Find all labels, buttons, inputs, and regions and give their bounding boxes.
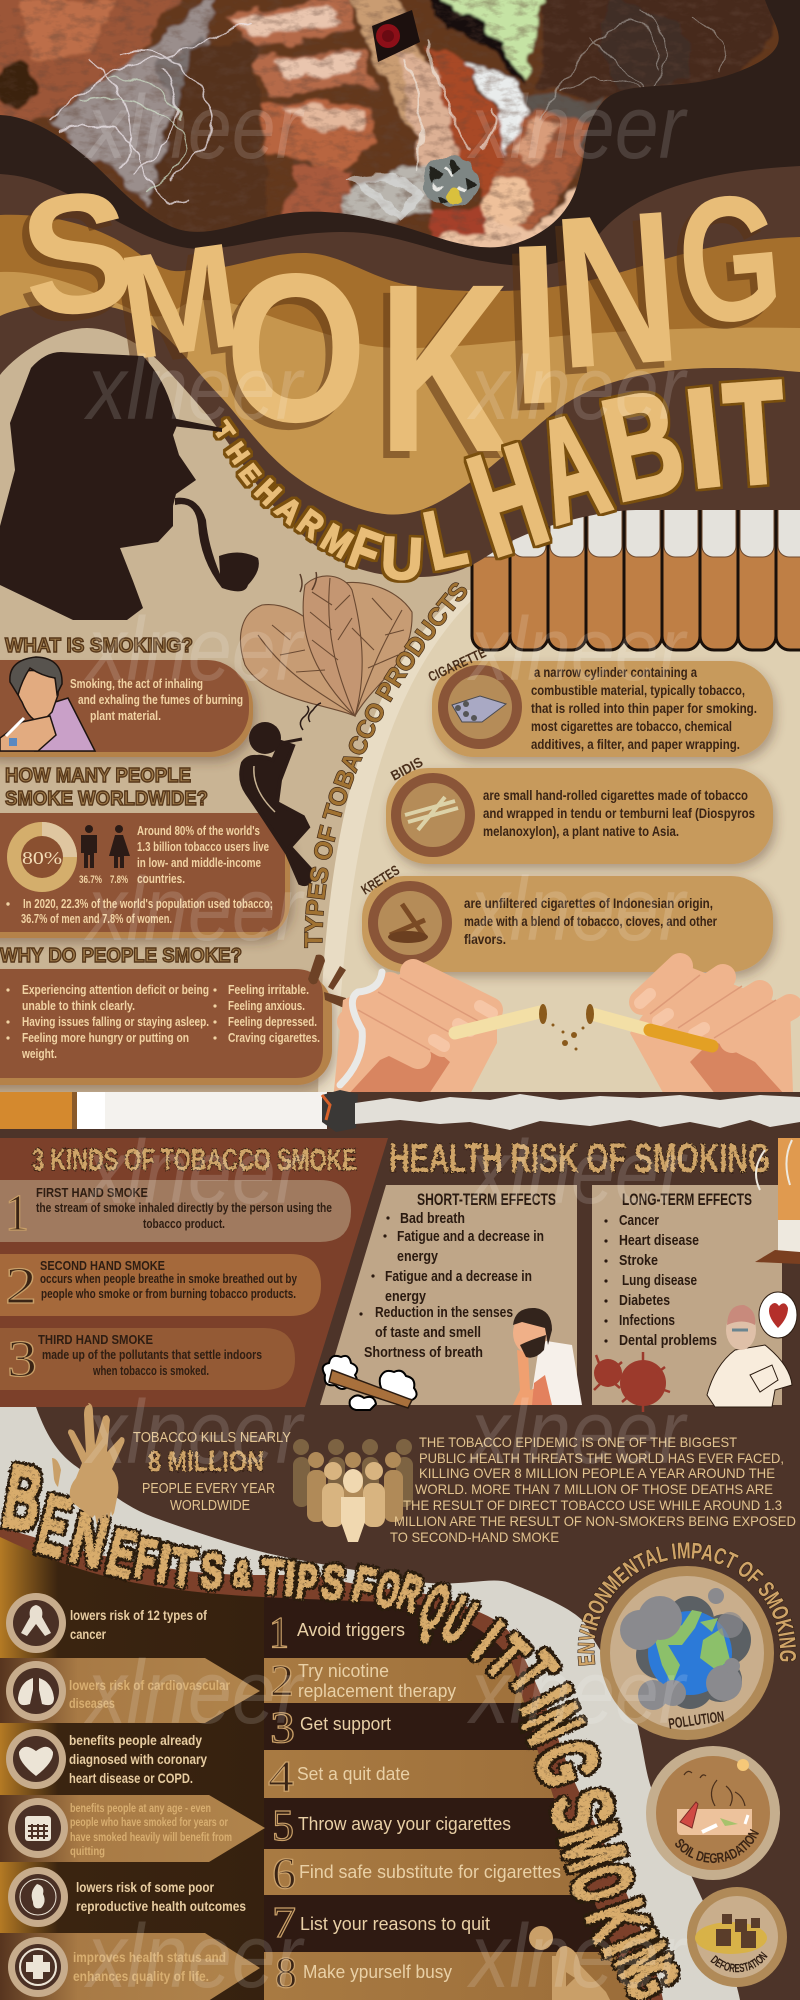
icon: man and woman with rates bbox=[79, 825, 130, 886]
icon: burning cigar with smoke bbox=[323, 1356, 417, 1410]
title: benefits and tips for quitting smoking: T bbox=[259, 1550, 285, 1605]
benefit: lowers cardiovascular risk: lowers risk of cardiovascular bbox=[69, 1677, 230, 1693]
panel: short-term effects bbox=[320, 1185, 582, 1410]
watermark pattern: xlneer bbox=[83, 78, 305, 178]
card: first hand smoke: the stream of smoke inhaled directly by the person using the bbox=[36, 1200, 332, 1215]
subtitle: The Harmful Habit: B bbox=[590, 358, 696, 532]
text: tobacco users: Around 80% of the world's bbox=[137, 823, 260, 838]
tip 5: 5 bbox=[272, 1801, 294, 1850]
text: tobacco users bbox=[6, 823, 273, 926]
heading: types of tobacco products: TYPES OF TOBACCO PRODUCTS bbox=[304, 582, 468, 948]
tip 4: 4 bbox=[268, 1752, 294, 1801]
title: SMOKING: N bbox=[547, 164, 686, 414]
benefit: lowers cancer risk: lowers risk of 12 types of bbox=[70, 1607, 207, 1623]
watermark pattern: xlneer bbox=[83, 860, 305, 960]
right hand bbox=[630, 963, 793, 1100]
stat: 8 million deaths: WORLDWIDE bbox=[170, 1497, 250, 1514]
title: benefits and tips for quitting smoking: M bbox=[540, 1813, 644, 1881]
title: benefits and tips for quitting smoking: O bbox=[370, 1560, 406, 1620]
text: tobacco users: in low- and middle-income bbox=[137, 855, 261, 870]
ash tip of the cigar bbox=[425, 156, 479, 208]
background: light arc behind tobacco products bbox=[318, 590, 800, 1100]
title: benefits and tips for quitting smoking: T bbox=[167, 1537, 199, 1599]
stat: 8 million deaths: PEOPLE EVERY YEAR bbox=[142, 1480, 275, 1497]
list: long-term effects: Infections bbox=[619, 1312, 675, 1329]
title: benefits and tips for quitting smoking: P bbox=[294, 1555, 320, 1610]
title: benefits and tips for quitting smoking: E bbox=[100, 1514, 144, 1592]
watermark pattern: xlneer bbox=[466, 339, 688, 439]
text: cigarette description: that is rolled into thin paper for smoking. bbox=[531, 700, 757, 716]
panel: how many people bbox=[0, 813, 290, 938]
chart: 80 percent ring bbox=[7, 822, 77, 892]
tip 8: Make ypurself busy bbox=[303, 1962, 452, 1982]
list: reasons right column: Craving cigarettes. bbox=[228, 1030, 320, 1045]
list: short-term effects: Shortness of breath bbox=[364, 1344, 483, 1361]
card: first hand smoke: 1 bbox=[5, 1185, 29, 1242]
subtitle: The Harmful Habit bbox=[208, 350, 791, 593]
title: benefits and tips for quitting smoking: I bbox=[504, 1673, 588, 1727]
title: benefits and tips for quitting smoking: Q bbox=[409, 1569, 461, 1645]
text block: tobacco epidemic: TO SECOND-HAND SMOKE bbox=[390, 1529, 559, 1545]
benefit: quality of life: improves health status and bbox=[73, 1949, 226, 1965]
tip 2 bbox=[270, 1656, 456, 1705]
title: benefits and tips for quitting smoking: K bbox=[568, 1889, 668, 1951]
smoke wisps bbox=[50, 10, 726, 215]
benefit: lowers cardiovascular risk bbox=[6, 1661, 230, 1721]
subtitle: The Harmful Habit: U bbox=[379, 524, 425, 593]
icon: virus particles bbox=[594, 1352, 670, 1412]
tip 8 bbox=[275, 1948, 452, 1997]
list: reasons left column: weight. bbox=[21, 1046, 57, 1061]
text: bidis description bbox=[483, 787, 755, 839]
illustration: hands breaking a cigarette bbox=[333, 963, 793, 1100]
label: cigarette: CIGARETTE bbox=[426, 644, 488, 685]
tip 5 bbox=[272, 1801, 511, 1850]
tip 2: replacement therapy bbox=[298, 1681, 456, 1701]
panel: kretes product bbox=[358, 862, 773, 972]
text block: tobacco epidemic: THE RESULT OF DIRECT TOBACCO USE WHILE AROUND 1.3 bbox=[403, 1497, 782, 1513]
benefit: any age: have smoked heavily will benefit from bbox=[70, 1832, 232, 1844]
benefit: heart disease: benefits people already bbox=[69, 1732, 202, 1748]
card: third hand smoke: when tobacco is smoked. bbox=[92, 1363, 209, 1378]
title: benefits and tips for quitting smoking: N bbox=[63, 1498, 115, 1584]
subtitle: The Harmful Habit: A bbox=[519, 382, 623, 554]
watermark pattern: xlneer bbox=[466, 860, 688, 960]
watermark pattern: xlneer bbox=[83, 1643, 305, 1743]
tip 4: Set a quit date bbox=[297, 1764, 410, 1784]
list: reasons left column: Feeling more hungry or putting on bbox=[22, 1030, 189, 1045]
torn paper edge bbox=[355, 1094, 800, 1130]
list: long-term effects: Heart disease bbox=[619, 1232, 699, 1249]
icon: sick person with heart bbox=[707, 1292, 797, 1407]
title: SMOKING bbox=[12, 154, 789, 502]
list: long-term effects: Stroke bbox=[619, 1252, 658, 1269]
title: benefits and tips for quitting smoking: R bbox=[391, 1563, 429, 1623]
text: definition of smoking bbox=[70, 676, 243, 723]
watermark pattern: xlneer bbox=[83, 1383, 305, 1483]
panel: three kinds of tobacco smoke bbox=[0, 1138, 388, 1407]
circle: pollution bbox=[600, 1566, 774, 1740]
heading: environmental impact of smoking: ENVIRONMENTAL IMPACT OF SMOKING bbox=[578, 1542, 796, 1666]
title: SMOKING: O bbox=[225, 229, 367, 466]
left hand bbox=[333, 968, 497, 1100]
text: cigarette description: a narrow cylinder containing a bbox=[534, 664, 697, 680]
panel: bidis product bbox=[386, 754, 773, 864]
card: second hand smoke: 2 bbox=[5, 1258, 37, 1315]
card: second hand smoke bbox=[0, 1254, 321, 1316]
title: benefits and tips for quitting smoking: I bbox=[283, 1553, 297, 1606]
list: short-term effects: Fatigue and a decrease in bbox=[385, 1268, 532, 1285]
text: tobacco users: 1.3 billion tobacco users live bbox=[137, 839, 269, 854]
label: kretes: KRETES bbox=[358, 862, 402, 898]
text: tobacco users: countries. bbox=[137, 871, 185, 886]
title: benefits and tips for quitting smoking: F bbox=[348, 1555, 380, 1615]
benefit: heart disease: heart disease or COPD. bbox=[69, 1770, 193, 1786]
cigarette strip bbox=[0, 1090, 358, 1132]
text: bidis description: are small hand-rolled cigarettes made of tobacco bbox=[483, 787, 748, 803]
watermark pattern: xlneer bbox=[83, 1123, 305, 1223]
list: short-term effects: Fatigue and a decrease in bbox=[397, 1228, 544, 1245]
panel: what is smoking bbox=[0, 657, 253, 757]
subtitle: The Harmful Habit: F bbox=[341, 515, 389, 584]
list: reasons left column bbox=[6, 982, 209, 1061]
title: benefits and tips for quitting smoking: I bbox=[460, 1607, 516, 1673]
icon: crowd of people bbox=[293, 1439, 413, 1542]
benefit: reproductive health bbox=[8, 1867, 246, 1927]
list: reasons right column: Feeling irritable. bbox=[228, 982, 309, 997]
list: reasons left column: unable to think clearly. bbox=[22, 998, 135, 1013]
title: benefits and tips for quitting smoking: S bbox=[531, 1777, 634, 1843]
footer band background bbox=[0, 1092, 800, 2000]
panel: dark benefits and tips area bbox=[0, 1530, 684, 2000]
subtitle: The Harmful Habit: T bbox=[208, 417, 239, 446]
title: benefits and tips for quitting smoking: T bbox=[472, 1622, 542, 1692]
watermark pattern: xlneer bbox=[466, 1643, 688, 1743]
card: third hand smoke: made up of the pollutants that settle indoors bbox=[42, 1347, 262, 1362]
label: bidis: BIDIS bbox=[388, 754, 425, 784]
title: SMOKING: I bbox=[505, 197, 566, 453]
icon: bidis bundle bbox=[391, 773, 475, 857]
text: kretes description bbox=[464, 895, 717, 947]
benefit: lowers cancer risk bbox=[6, 1593, 207, 1653]
icon: burning cigarette at right bbox=[755, 1138, 800, 1264]
title: benefits and tips for quitting smoking: S bbox=[198, 1542, 226, 1600]
benefit banners bbox=[0, 1658, 265, 2000]
text block: tobacco epidemic bbox=[390, 1434, 796, 1545]
subtitle: The Harmful Habit: A bbox=[269, 489, 309, 531]
card: third hand smoke bbox=[0, 1328, 295, 1390]
tip 6: 6 bbox=[272, 1849, 296, 1898]
list: reasons left column: Having issues falling or staying asleep. bbox=[22, 1014, 209, 1029]
list: short-term effects: energy bbox=[397, 1248, 439, 1265]
list: long-term effects: Lung disease bbox=[622, 1272, 697, 1289]
watermark pattern: xlneer bbox=[83, 600, 305, 700]
benefit: any age: people who have smoked for years or bbox=[70, 1817, 228, 1829]
icon: coughing bearded man bbox=[513, 1308, 582, 1405]
watermark pattern: xlneer bbox=[83, 339, 305, 439]
title: benefits and tips for quitting smoking: I bbox=[153, 1533, 175, 1595]
tip 7: List your reasons to quit bbox=[300, 1914, 490, 1934]
text: definition of smoking: plant material. bbox=[90, 708, 161, 723]
text block: tobacco epidemic: KILLING OVER 8 MILLION PEOPLE A YEAR AROUND THE bbox=[419, 1465, 775, 1481]
title: benefits and tips for quitting smoking: U bbox=[431, 1582, 487, 1658]
benefit: quality of life: enhances quality of life. bbox=[73, 1968, 209, 1984]
background: beige main panel bbox=[0, 300, 800, 1100]
benefit: reproductive health: reproductive health outcomes bbox=[76, 1898, 246, 1914]
card: first hand smoke bbox=[0, 1180, 351, 1242]
text: cigarette description: additives, a filter, and paper wrapping. bbox=[531, 736, 740, 752]
subtitle: The Harmful Habit: R bbox=[291, 502, 331, 547]
icon: man lighting cigarette bbox=[0, 657, 95, 751]
tip 3 bbox=[270, 1703, 391, 1752]
list: long-term effects: Diabetes bbox=[619, 1292, 670, 1309]
benefit: any age bbox=[8, 1798, 232, 1858]
cigar band bbox=[372, 10, 420, 62]
card: third hand smoke: 3 bbox=[7, 1331, 37, 1388]
list: reasons left column: Experiencing attention deficit or being bbox=[22, 982, 209, 997]
list: short-term effects: energy bbox=[385, 1288, 427, 1305]
heading: 3 kinds: 3 KINDS OF TOBACCO SMOKE bbox=[32, 1142, 357, 1177]
benefit: lowers cardiovascular risk: diseases bbox=[69, 1695, 115, 1711]
stat: 8 million deaths bbox=[133, 1429, 291, 1514]
heading: what is smoking: WHAT IS SMOKING? bbox=[5, 635, 193, 657]
subtitle: The Harmful Habit: M bbox=[314, 517, 359, 567]
list: long-term effects: Dental problems bbox=[619, 1332, 717, 1349]
tip 1 bbox=[269, 1608, 405, 1657]
benefit: reproductive health: lowers risk of some poor bbox=[76, 1879, 214, 1895]
list: reasons right column bbox=[213, 982, 320, 1045]
watermark pattern bbox=[83, 78, 688, 2000]
text block: tobacco epidemic: THE TOBACCO EPIDEMIC IS ONE OF THE BIGGEST bbox=[419, 1434, 737, 1450]
tip 3: 3 bbox=[270, 1703, 295, 1752]
circle: soil degradation: SOIL DEGRADATION bbox=[675, 1828, 759, 1864]
title: benefits and tips for quitting smoking: N bbox=[504, 1692, 602, 1756]
title: benefits and tips for quitting smoking: S bbox=[318, 1556, 347, 1611]
tip 1: 1 bbox=[269, 1608, 289, 1657]
benefit: any age: benefits people at any age - even bbox=[70, 1803, 211, 1815]
text: definition of smoking: and exhaling the fumes of burning bbox=[78, 692, 243, 707]
heading: how many people smoke worldwide bbox=[5, 765, 208, 810]
circle: soil degradation bbox=[646, 1746, 780, 1880]
tip 2: 2 bbox=[270, 1656, 294, 1705]
tip 6 bbox=[272, 1849, 561, 1898]
title: benefits and tips for quitting smoking: G bbox=[515, 1729, 619, 1797]
icon: cigarette bundle bbox=[438, 665, 522, 749]
tip bands bbox=[264, 1658, 630, 2000]
panel: why do people smoke bbox=[0, 969, 332, 1085]
title: SMOKING: K bbox=[378, 234, 510, 502]
text: kretes description: flavors. bbox=[464, 931, 506, 947]
tip 1: Avoid triggers bbox=[297, 1620, 405, 1640]
card: second hand smoke: occurs when people breathe in smoke breathed out by bbox=[40, 1271, 298, 1286]
text: bidis description: melanoxylon), a plant native to Asia. bbox=[483, 823, 679, 839]
tip 7: 7 bbox=[272, 1898, 296, 1947]
text block: tobacco epidemic: WORLD. MORE THAN 7 MILLION OF THOSE DEATHS ARE bbox=[415, 1481, 773, 1497]
panel: cigarette product bbox=[426, 644, 773, 757]
tip 3: Get support bbox=[300, 1714, 391, 1734]
text: cigarette description: combustible material, typically tobacco, bbox=[531, 682, 745, 698]
chart: 80 percent ring: 80% bbox=[22, 848, 62, 868]
watermark pattern: xlneer bbox=[466, 600, 688, 700]
text: cigarette description: most cigarettes are tobacco, chemical bbox=[531, 718, 732, 734]
smoke plume bbox=[340, 972, 382, 1085]
list: short-term effects: Bad breath bbox=[400, 1210, 465, 1227]
stat: 8 million deaths: TOBACCO KILLS NEARLY bbox=[133, 1429, 291, 1446]
list: short-term effects: of taste and smell bbox=[375, 1324, 481, 1341]
list: long-term effects bbox=[604, 1212, 717, 1349]
subtitle: The Harmful Habit: H bbox=[221, 437, 255, 469]
broken cigarette pieces bbox=[455, 1004, 712, 1050]
benefit: lowers cancer risk: cancer bbox=[70, 1626, 106, 1642]
text: definition of smoking: Smoking, the act of inhaling bbox=[70, 676, 203, 691]
title: benefits and tips for quitting smoking: E bbox=[29, 1477, 79, 1576]
subtitle: The Harmful Habit: H bbox=[453, 413, 563, 587]
circle: deforestation bbox=[687, 1887, 787, 1987]
list: short-term effects: Reduction in the senses bbox=[375, 1304, 513, 1321]
benefit: heart disease: diagnosed with coronary bbox=[69, 1751, 207, 1767]
list: short-term effects bbox=[359, 1210, 544, 1361]
title: benefits and tips for quitting smoking: I bbox=[586, 1920, 673, 1966]
icon: emphasis marks bbox=[308, 955, 346, 1008]
text: kretes description: made with a blend of tobacco, cloves, and other bbox=[464, 913, 717, 929]
card: first hand smoke: tobacco product. bbox=[143, 1216, 225, 1231]
tip 2: Try nicotine bbox=[298, 1661, 389, 1681]
wave: lower brown band behind Habit bbox=[0, 0, 800, 577]
text: kretes description: are unfiltered cigarettes of Indonesian origin, bbox=[464, 895, 713, 911]
tip 5: Throw away your cigarettes bbox=[298, 1814, 511, 1834]
tip 6: Find safe substitute for cigarettes bbox=[299, 1862, 561, 1882]
benefit: any age: quitting bbox=[70, 1846, 105, 1858]
photo: hand holding cigar bbox=[0, 0, 779, 248]
wave: dark band bbox=[0, 0, 800, 266]
card: second hand smoke: people who smoke or from burning tobacco products. bbox=[41, 1286, 296, 1301]
subtitle: The Harmful Habit: I bbox=[678, 358, 730, 517]
heading: short-term: SHORT-TERM EFFECTS bbox=[417, 1190, 556, 1209]
icon: dripping hand print bbox=[52, 1403, 125, 1525]
silhouette: detective head with pipe bbox=[0, 352, 259, 620]
subtitle: The Harmful Habit: L bbox=[416, 488, 474, 588]
tip 8: 8 bbox=[275, 1948, 297, 1997]
panel: long-term effects bbox=[592, 1185, 797, 1412]
tip 7 bbox=[272, 1898, 490, 1947]
list: reasons right column: Feeling depressed. bbox=[228, 1014, 317, 1029]
stat: 8 million deaths: 8 MILLION bbox=[148, 1446, 264, 1478]
list: long-term effects: Cancer bbox=[619, 1212, 659, 1229]
title: benefits and tips for quitting smoking: & bbox=[232, 1552, 252, 1595]
icon: man and woman with rates: 36.7% bbox=[79, 874, 102, 886]
swoosh: white curve bbox=[0, 1407, 740, 2000]
icon: small tan person bbox=[529, 1926, 610, 2000]
circle: pollution: POLLUTION bbox=[667, 1708, 725, 1733]
text: tobacco users: 36.7% of men and 7.8% of women. bbox=[21, 911, 172, 926]
wave: upper brown band bbox=[0, 0, 800, 291]
heading: how many people smoke worldwide: SMOKE WORLDWIDE? bbox=[5, 788, 208, 810]
icon: kretes with tobacco bbox=[368, 881, 452, 965]
watermark pattern: xlneer bbox=[466, 1383, 688, 1483]
title: benefits and tips for quitting smoking: F bbox=[131, 1526, 161, 1591]
icon: seated smoker figure bbox=[241, 703, 321, 884]
circle: deforestation: DEFORESTATION bbox=[710, 1951, 768, 1972]
card: first hand smoke: FIRST HAND SMOKE bbox=[36, 1185, 148, 1200]
card: third hand smoke: THIRD HAND SMOKE bbox=[38, 1332, 153, 1347]
watermark pattern: xlneer bbox=[466, 1123, 688, 1223]
benefit: quality of life bbox=[8, 1937, 226, 1997]
watermark pattern: xlneer bbox=[466, 78, 688, 178]
icon: tobacco leaves bbox=[240, 572, 412, 716]
heading: how many people smoke worldwide: HOW MANY PEOPLE bbox=[5, 765, 191, 787]
card: second hand smoke: SECOND HAND SMOKE bbox=[40, 1258, 165, 1273]
row of cigarettes bbox=[472, 490, 800, 650]
text: tobacco users: In 2020, 22.3% of the world's population used tobacco; bbox=[23, 896, 273, 911]
title: SMOKING: S bbox=[12, 154, 142, 355]
title: benefits and tips for quitting smoking bbox=[0, 1446, 696, 2000]
subtitle: The Harmful Habit: E bbox=[233, 458, 267, 490]
swoosh: red-brown curve bbox=[0, 1527, 663, 2000]
title: benefits and tips for quitting smoking: O bbox=[551, 1853, 653, 1913]
subtitle: The Harmful Habit: H bbox=[248, 472, 288, 512]
title: benefits and tips for quitting smoking: T bbox=[495, 1640, 571, 1706]
wave: amber band bbox=[0, 0, 800, 348]
wave: light tan bowl bbox=[0, 0, 800, 514]
icon: man and woman with rates: 7.8% bbox=[110, 874, 128, 886]
heading: why do people smoke: WHY DO PEOPLE SMOKE? bbox=[0, 945, 242, 967]
list: reasons right column: Feeling anxious. bbox=[228, 998, 305, 1013]
tip 4 bbox=[268, 1752, 410, 1801]
text: cigarette description bbox=[531, 664, 757, 752]
title: SMOKING: M bbox=[110, 212, 250, 392]
benefit: heart disease bbox=[6, 1729, 207, 1789]
